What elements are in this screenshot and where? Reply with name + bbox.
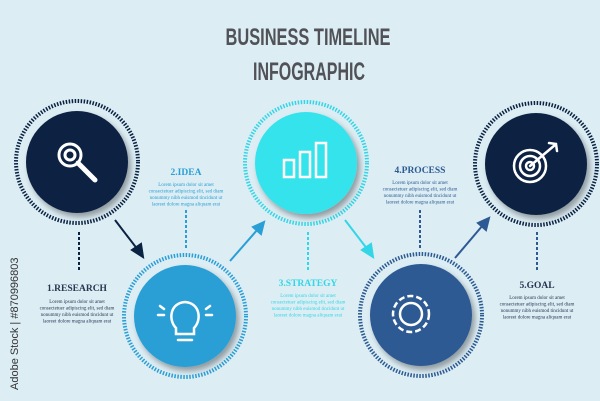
text: strategy: 3.STRATEGY (279, 279, 337, 289)
icon: magnifier (59, 144, 95, 180)
text: process: 4.PROCESS (395, 166, 445, 176)
arrow 3 (345, 220, 373, 257)
step 5: goal circle (475, 103, 597, 225)
text: idea: Lorem ipsum dolor sit amet (158, 183, 214, 188)
text: goal: consectetuer adipiscing elit, sed diam (500, 302, 575, 308)
text: research: consectetuer adipiscing elit, sed diam (40, 306, 115, 312)
icon: bar chart (284, 143, 326, 177)
text: research: Lorem ipsum dolor sit amet (49, 300, 105, 305)
step 1: research circle (16, 101, 138, 223)
text: strategy: laoreet dolore magna aliquam erat (274, 314, 343, 318)
text: process (383, 166, 458, 206)
text: process: consectetuer adipiscing elit, sed diam (383, 188, 458, 192)
step 3: strategy circle (245, 102, 367, 224)
title: INFOGRAPHIC (253, 58, 365, 86)
icon: gear (393, 296, 429, 332)
text: research: nonummy nibh euismod tincidunt ut (41, 313, 114, 318)
dashed connectors (79, 210, 537, 272)
icon: light bulb (158, 302, 212, 340)
text: process: nonummy nibh euismod tincidunt ut (384, 194, 457, 199)
step 2: idea circle (124, 255, 246, 377)
text: goal (500, 281, 575, 320)
text: idea: nonummy nibh euismod tincidunt ut (150, 196, 223, 201)
text: idea: 2.IDEA (171, 168, 202, 178)
text: idea: consectetuer adipiscing elit, sed diam (149, 190, 224, 194)
arrow 1 (115, 220, 143, 257)
text: process: laoreet dolore magna aliquam erat (386, 200, 455, 206)
arrow 2 (230, 222, 264, 261)
text: strategy (271, 279, 346, 318)
title (226, 24, 390, 86)
text: goal: 5.GOAL (519, 281, 555, 291)
text: strategy: Lorem ipsum dolor sit amet (280, 294, 336, 299)
text: research: 1.RESEARCH (47, 284, 108, 294)
text: process: Lorem ipsum dolor sit amet (392, 181, 448, 186)
text: goal: Lorem ipsum dolor sit amet (509, 296, 565, 301)
text: goal: laoreet dolore magna aliquam erat (503, 316, 572, 320)
title: BUSINESS TIMELINE (226, 24, 390, 51)
text: goal: nonummy nibh euismod tincidunt ut (501, 309, 574, 314)
text: idea: laoreet dolore magna aliquam erat (152, 202, 221, 208)
text: strategy: consectetuer adipiscing elit, sed diam (271, 300, 346, 306)
icon: target (514, 143, 557, 182)
text: research (40, 284, 115, 324)
text: research: laoreet dolore magna aliquam erat (43, 320, 112, 324)
text: strategy: nonummy nibh euismod tincidunt ut (272, 307, 345, 312)
watermark id: Adobe Stock | #870996803 (9, 257, 21, 390)
step 4: process circle (360, 254, 482, 376)
text: idea (149, 168, 224, 208)
arrow 4 (455, 218, 489, 258)
